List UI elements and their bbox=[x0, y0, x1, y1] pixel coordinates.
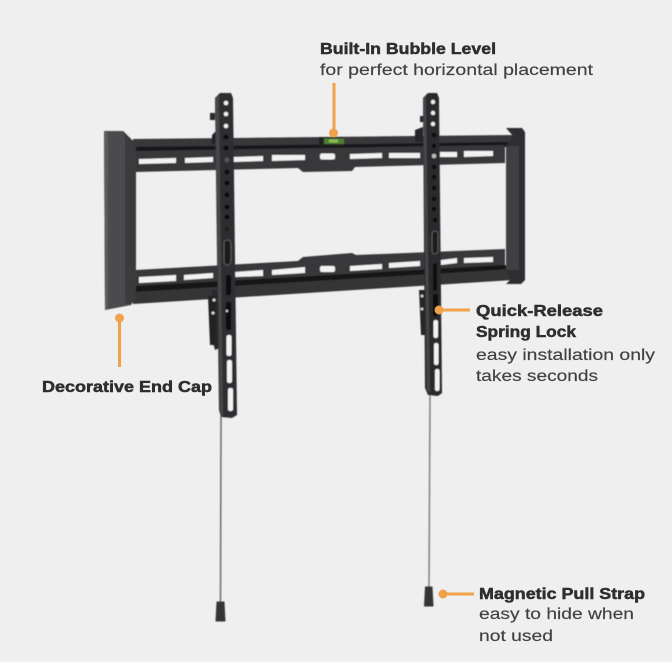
callout: built-in bubble level: Built-In Bubble Level bbox=[320, 41, 496, 58]
leader: end cap bbox=[115, 314, 124, 367]
left pull strap and weight bbox=[216, 416, 225, 621]
left vertical bracket bbox=[208, 93, 237, 418]
callout: decorative end cap: Decorative End Cap bbox=[42, 379, 212, 396]
right vertical bracket bbox=[415, 93, 442, 396]
left decorative end cap bbox=[104, 131, 136, 310]
right pull strap and weight bbox=[424, 395, 433, 606]
upper and lower rails bbox=[133, 135, 513, 304]
wall mount product bbox=[104, 93, 525, 621]
callout: magnetic pull strap: Magnetic Pull Strap bbox=[479, 586, 645, 603]
bubble level bbox=[319, 137, 344, 146]
callout: magnetic pull strap: not used bbox=[479, 628, 553, 645]
callout: quick-release spring lock: takes seconds bbox=[476, 368, 598, 385]
callout: magnetic pull strap: easy to hide when bbox=[479, 606, 634, 623]
left bracket holes bbox=[212, 101, 233, 411]
leader: bubble level bbox=[329, 83, 338, 138]
callout: quick-release spring lock bbox=[476, 303, 655, 385]
callout: built-in bubble level bbox=[320, 41, 594, 79]
right end cap bbox=[506, 128, 525, 284]
callout: quick-release spring lock: easy installation only bbox=[476, 347, 655, 364]
callout: quick-release spring lock: Spring Lock bbox=[476, 324, 576, 341]
callout: magnetic pull strap bbox=[479, 586, 645, 645]
leader: pull strap bbox=[438, 590, 474, 598]
callout: quick-release spring lock: Quick-Release bbox=[476, 303, 603, 320]
right bracket holes bbox=[421, 100, 440, 391]
mounting slots bbox=[139, 151, 493, 283]
leader: spring lock bbox=[434, 306, 470, 314]
callout: built-in bubble level: for perfect horizontal placement bbox=[320, 62, 594, 79]
